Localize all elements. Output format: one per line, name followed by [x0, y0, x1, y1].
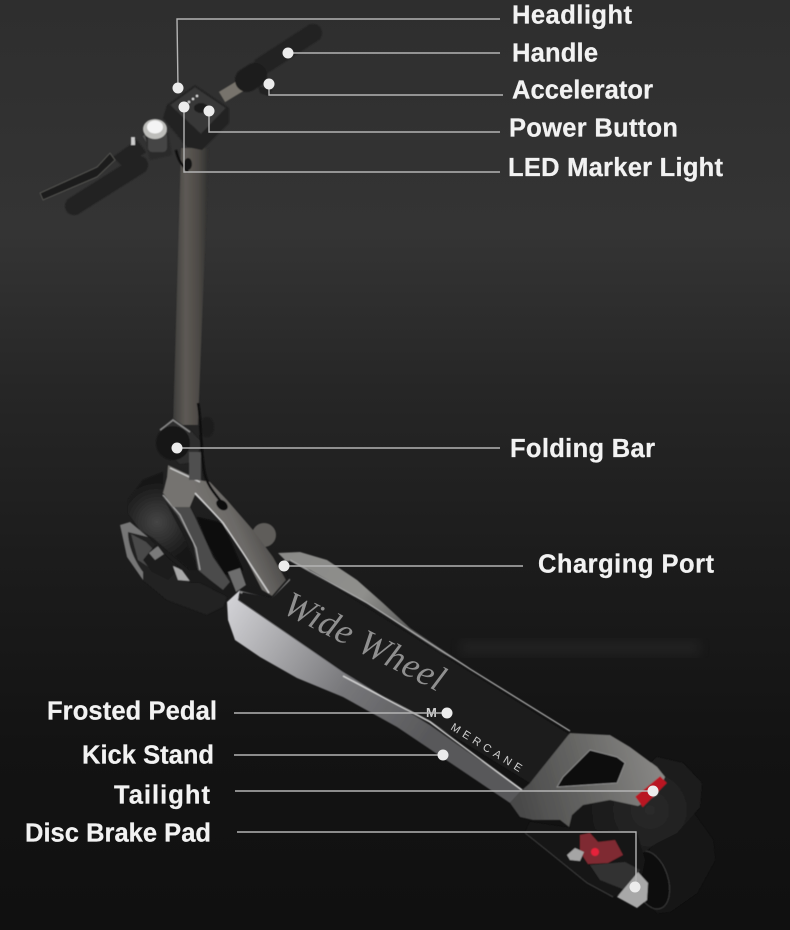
callout: Kick Stand [82, 742, 448, 770]
callout: LED Marker Light: LED Marker Light [508, 154, 724, 182]
deck stripe [343, 676, 522, 790]
faint deck reflection smudge [460, 640, 700, 656]
callout: Disc Brake Pad: Disc Brake Pad [25, 820, 211, 848]
brake machinery [590, 862, 640, 890]
callout: LED Marker Light [178, 102, 724, 182]
callout: Charging Port [278, 550, 714, 578]
callout: Power Button: Power Button [509, 114, 678, 142]
rear motor cover [525, 822, 645, 897]
rear wheel rim [626, 846, 676, 914]
display box [163, 85, 229, 150]
callout: Frosted Pedal: Frosted Pedal [47, 698, 217, 726]
deck right silver flank [278, 552, 470, 668]
socket details [228, 568, 246, 592]
rear tyre [640, 808, 715, 913]
side knob [252, 523, 276, 547]
black deck mat [238, 560, 570, 783]
folding joint [156, 403, 230, 513]
callout: Folding Bar: Folding Bar [510, 435, 655, 463]
callout: Charging Port: Charging Port [538, 550, 714, 578]
callout: Accelerator [264, 76, 653, 104]
rear fender [569, 757, 702, 853]
callout: Tailight: Tailight [114, 782, 210, 810]
fork inner arm [163, 497, 230, 590]
fork socket rim [240, 560, 292, 600]
fork main arm [163, 465, 286, 596]
left handlebar, bell and brake lever [40, 119, 192, 206]
tail light [638, 779, 664, 804]
brake caliper [567, 833, 623, 864]
callout: Power Button [204, 106, 678, 142]
callout: Tailight [114, 782, 658, 810]
callout: Folding Bar [172, 435, 655, 463]
brand mark and name: M [426, 705, 437, 720]
brand mark and name [426, 705, 528, 777]
callout: Handle: Handle [512, 40, 598, 68]
rear deck opening [557, 750, 625, 787]
callout: Frosted Pedal [47, 698, 452, 726]
deck lettering: Wide Wheel: Wide Wheel [277, 583, 452, 699]
deck left silver flank [227, 590, 522, 803]
callout: Headlight: Headlight [512, 2, 632, 30]
callout: Headlight [172, 2, 632, 94]
right handlebar [222, 33, 313, 97]
brake disc [617, 872, 648, 908]
callout: Accelerator: Accelerator [512, 76, 653, 104]
black gap behind fork [197, 517, 243, 575]
callout: Handle [282, 40, 598, 68]
brand mark and name: MERCANE [448, 721, 528, 777]
rear frame [510, 733, 665, 827]
callout: Kick Stand: Kick Stand [82, 742, 214, 770]
callout: Disc Brake Pad [25, 820, 640, 892]
front fender [128, 472, 198, 570]
stem tube [173, 148, 209, 425]
front hub and wheel [120, 522, 227, 615]
